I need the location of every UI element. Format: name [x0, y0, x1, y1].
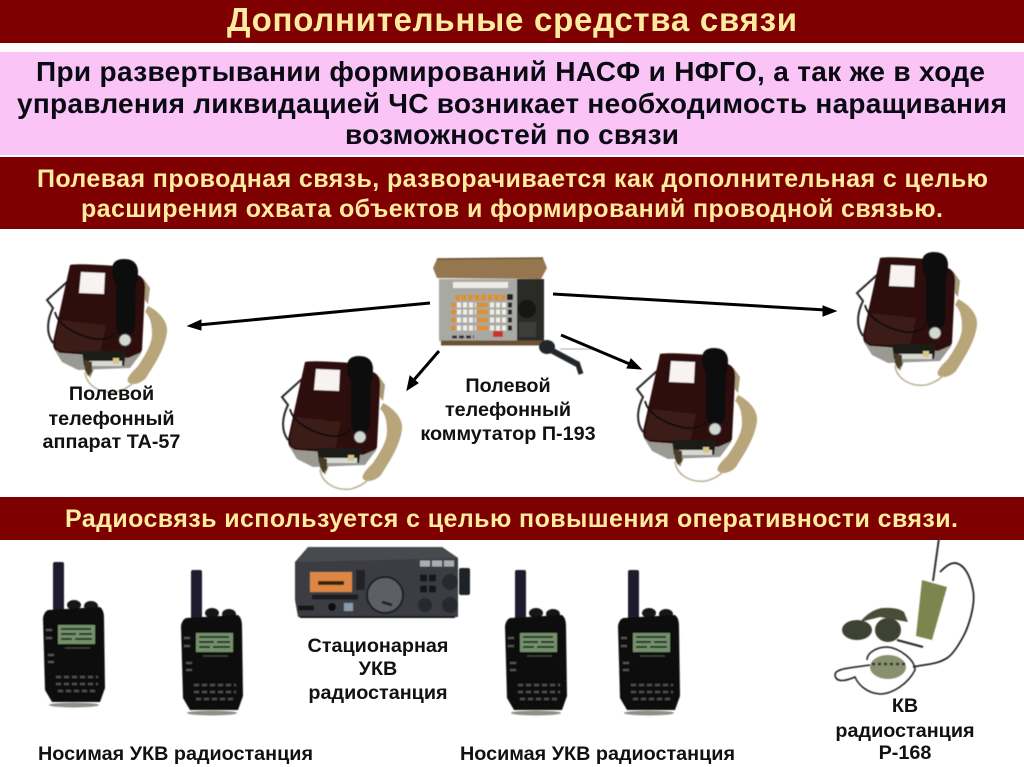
banner: radio communication: Радиосвязь используется с целью повышения оперативности связи.: [65, 505, 958, 533]
label: P-193: Полевой: [465, 375, 551, 397]
title: Дополнительные средства связи: [227, 1, 797, 38]
label: P-193: [420, 375, 596, 445]
label: P-193: телефонный: [445, 399, 571, 421]
panel: intro text: управления ликвидацией ЧС возникает необходимость наращивания: [17, 88, 1007, 119]
label: R-168: [835, 695, 975, 764]
label: stationary radio: радиостанция: [308, 682, 448, 704]
banner: radio communication: [0, 497, 1024, 540]
title bar: [0, 0, 1024, 43]
label: portable VHF radio right: Носимая УКВ радиостанция: [460, 743, 735, 765]
label: R-168: КВ: [892, 695, 918, 717]
arrow: to telephone 1: [188, 303, 430, 330]
label: stationary radio: [308, 635, 448, 704]
icon: field telephone 4: [857, 252, 977, 385]
icon: handheld radio 2: [181, 570, 243, 716]
banner: wired communication: Полевая проводная связь, разворачивается как дополнительная с целью: [37, 165, 988, 193]
panel: intro text: [0, 52, 1024, 155]
icon: field telephone 1: [47, 259, 167, 392]
icon: field telephone 2: [282, 356, 402, 489]
label: stationary radio: Стационарная: [308, 635, 448, 657]
panel: intro text: При развертывании формирований НАСФ и НФГО, а так же в ходе: [36, 56, 985, 87]
label: R-168: радиостанция: [835, 720, 975, 742]
icon: stationary VHF radio: [295, 547, 470, 617]
icon: handheld radio 4: [618, 570, 680, 716]
icon: handset: [539, 340, 592, 374]
label: TA-57: Полевой: [69, 383, 154, 405]
icon: handheld radio 3: [505, 570, 567, 716]
label: TA-57: аппарат ТА-57: [43, 431, 180, 453]
icon: HF radio R-168: [835, 538, 974, 694]
label: TA-57: телефонный: [48, 408, 175, 430]
label: TA-57: [43, 383, 180, 453]
icon: field telephone 3: [637, 348, 757, 481]
label: P-193: коммутатор П-193: [420, 423, 596, 445]
icon: field switchboard P-193: [433, 258, 592, 374]
arrow: to telephone 4: [553, 294, 836, 316]
label: portable VHF radio left: Носимая УКВ радиостанция: [38, 743, 313, 765]
banner: wired communication: [0, 157, 1024, 229]
icon: handheld radio 1: [43, 562, 105, 708]
label: stationary radio: УКВ: [359, 658, 397, 680]
arrow: to telephone 3: [561, 335, 641, 369]
panel: intro text: возможностей по связи: [345, 119, 679, 150]
banner: wired communication: расширения охвата объектов и формирований проводной связью.: [81, 195, 943, 223]
label: R-168: Р-168: [879, 742, 931, 764]
arrow: to telephone 2: [407, 351, 439, 390]
